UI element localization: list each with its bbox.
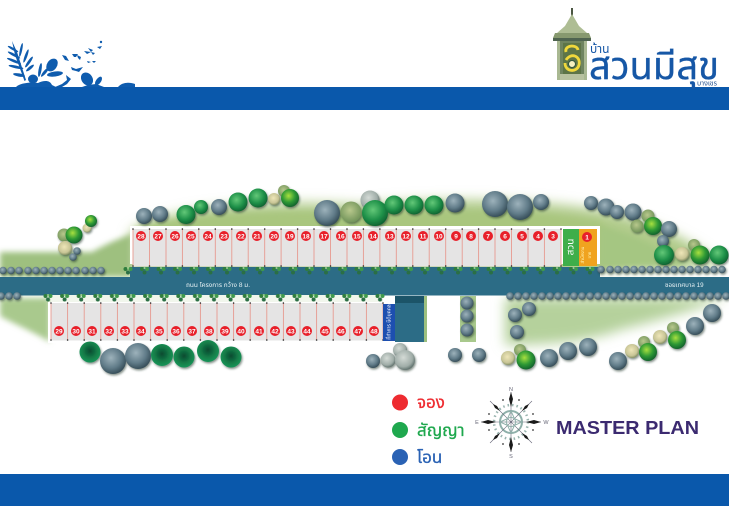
plot 1: ขาย (587, 251, 592, 258)
lower plot numbers: 32 (105, 328, 113, 336)
tree row: bottom left (80, 340, 242, 374)
upper plot numbers: 18 (302, 234, 310, 240)
lower plot numbers: 30 (72, 328, 80, 336)
upper plot numbers: 16 (337, 234, 345, 240)
upper plot numbers: 19 (286, 234, 294, 240)
upper plot numbers: 26 (171, 234, 179, 240)
legend: transferred: โอน (417, 448, 442, 467)
upper plot numbers: 12 (402, 234, 410, 240)
lower plot numbers: 44 (303, 328, 311, 336)
upper plot numbers: 9 (454, 234, 458, 240)
compass rose: E (475, 420, 479, 426)
blue office plot: ที่ทำการ นิติบุคคล (384, 304, 392, 340)
upper plot numbers: 4 (536, 234, 540, 240)
logo small location: บางเขร (697, 80, 718, 88)
legend (392, 393, 465, 467)
lower plot numbers: 41 (255, 328, 263, 336)
lower plot numbers: 48 (370, 328, 378, 336)
upper plot numbers: 13 (386, 234, 394, 240)
lower row plots 29 to 48 (48, 302, 384, 343)
plot 1: สำนักงาน (579, 246, 585, 263)
upper plot markers (136, 231, 558, 241)
tree cluster: bottom right (501, 302, 721, 370)
upper plot numbers: 3 (551, 234, 555, 240)
logo tower (553, 8, 591, 80)
legend: reserved: จอง (417, 393, 445, 412)
compass rose: N (509, 387, 513, 393)
tree cluster: left (58, 215, 97, 261)
logo main word: สวนมีสุข (589, 46, 719, 89)
side street label: ซอยเทศบาล 19 (665, 282, 704, 289)
lower plot numbers: 43 (287, 328, 295, 336)
lower plot numbers (55, 328, 378, 336)
lower plot numbers: 29 (55, 328, 63, 336)
tree row: top (136, 185, 549, 226)
upper plot numbers: 21 (253, 234, 261, 240)
logo (553, 8, 719, 89)
upper plot numbers: 8 (469, 234, 473, 240)
lower plot numbers: 36 (172, 328, 180, 336)
plot 1 (579, 229, 597, 266)
legend: contract: สัญญา (417, 421, 465, 440)
upper plot numbers: 23 (220, 234, 228, 240)
upper plot numbers: 28 (137, 234, 145, 240)
plot 1: 1 (585, 234, 589, 242)
lower plot numbers: 31 (88, 328, 96, 336)
compass rose (475, 387, 549, 460)
lower plot numbers: 39 (221, 328, 229, 336)
lower plot numbers: 47 (354, 328, 362, 336)
upper plot numbers: 20 (270, 234, 278, 240)
garden plot (563, 229, 579, 266)
tree arc: right (584, 196, 728, 265)
road (0, 267, 729, 303)
lower plot numbers: 38 (205, 328, 213, 336)
lower plot numbers: 35 (155, 328, 163, 336)
lower plot numbers: 33 (121, 328, 129, 336)
upper plot numbers: 5 (520, 234, 524, 240)
lower plot numbers: 42 (271, 328, 279, 336)
upper plot numbers: 22 (237, 234, 245, 240)
upper plot numbers: 14 (369, 234, 377, 240)
upper plot numbers: 25 (187, 234, 195, 240)
upper plot numbers: 27 (154, 234, 162, 240)
upper plot numbers: 11 (420, 234, 427, 240)
master plan title: MASTER PLAN (556, 418, 699, 438)
upper plot numbers: 15 (353, 234, 361, 240)
tree cluster: entrance (366, 296, 486, 370)
bottom blue band (0, 474, 729, 506)
upper plot numbers: 6 (503, 234, 507, 240)
trees (58, 185, 728, 374)
lower plot numbers: 37 (188, 328, 196, 336)
roadside shrubs (40, 265, 598, 303)
logo small word: บ้าน (590, 42, 609, 56)
compass rose: S (509, 454, 513, 460)
upper plot numbers: 10 (435, 234, 443, 240)
garden plot: สวน (566, 239, 577, 255)
lower plot markers (54, 326, 379, 336)
landscape lawn (0, 200, 729, 345)
teal entrance block (395, 296, 424, 342)
lower plot numbers: 40 (237, 328, 245, 336)
blue office plot (383, 304, 395, 341)
upper plot numbers (137, 234, 555, 240)
upper plot numbers: 17 (320, 234, 328, 240)
compass rose: W (543, 420, 549, 426)
top blue band (0, 87, 729, 110)
upper row plots 28 to 3 (130, 226, 600, 266)
lower plot numbers: 46 (337, 328, 345, 336)
decoration: leaves and birds (7, 41, 135, 88)
lower plot numbers: 45 (321, 328, 329, 336)
lower plot numbers: 34 (137, 328, 145, 336)
upper plot numbers: 24 (204, 234, 212, 240)
road-edge stones (0, 266, 729, 300)
road label: ถนน โครงการ กว้าง 8 ม. (186, 281, 250, 289)
upper plot numbers: 7 (486, 234, 490, 240)
